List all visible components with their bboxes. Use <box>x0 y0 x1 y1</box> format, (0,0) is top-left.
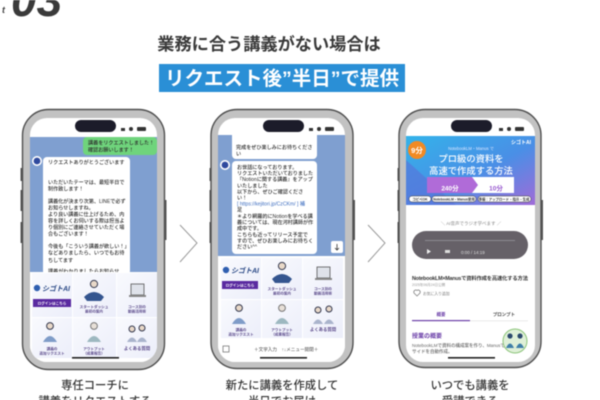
audio player <box>412 231 528 259</box>
phone 3 <box>398 110 543 368</box>
coach reply bubble: 講義化が決まり次第、LINEで必ず <box>48 198 126 205</box>
notch <box>263 120 304 132</box>
delivery message bubble: 『Notionに関する講義』をアップ <box>237 176 313 183</box>
user message bubble: 講義をリクエストしました！ <box>88 140 154 146</box>
coach reply bubble: いただいたテーマは、最短半日で <box>48 179 124 186</box>
logo cell: ログインはこちら <box>38 300 67 306</box>
status icons <box>121 127 146 131</box>
comparison bar <box>427 177 514 193</box>
favorite: お気に入り追加 <box>423 291 450 296</box>
menu request <box>39 323 65 356</box>
lecture banner: コピペOK <box>412 196 428 201</box>
menu request: 追加リクエスト <box>228 332 254 336</box>
menu faq: よくある質問 <box>310 326 337 333</box>
notch <box>75 120 116 132</box>
delivery message bubble: すので、ぜひお楽しみにお待ちく <box>237 238 313 244</box>
menu start guide: スタートダッシュ <box>80 304 109 309</box>
duration badge: 9分 <box>411 145 423 155</box>
audio player: 0:00 / 14:19 <box>461 250 485 255</box>
coach reply bubble: リクエストありがとうございます <box>48 159 124 166</box>
input bar <box>223 346 318 353</box>
comparison bar: 10分 <box>489 184 503 192</box>
summary text: NotebookLMで資料の構成案を作り、Manusで <box>412 342 505 349</box>
menu output: （成果報告） <box>271 332 293 336</box>
home indicator <box>260 357 307 359</box>
logo cell <box>222 266 260 289</box>
user message bubble: 確認お願いします！ <box>88 146 134 154</box>
lecture banner: NotebookLM・Manus で <box>448 146 494 151</box>
logo cell: ログインはこちら <box>226 282 255 288</box>
coach badge <box>503 329 527 353</box>
delivery message bubble: ＊より網羅的にNotionを学べる講 <box>237 213 313 220</box>
status icons <box>499 127 524 131</box>
home indicator <box>72 357 119 359</box>
user message bubble <box>83 137 157 155</box>
phone 2 frame <box>210 110 355 368</box>
coach reply bubble: り個別にご連絡させていただく場 <box>48 224 124 231</box>
date: 2025年06月24日公開 <box>412 282 446 287</box>
caption 3 <box>430 378 510 400</box>
tabs: プロンプト <box>493 311 515 318</box>
phone 3 frame <box>398 110 543 368</box>
coach reply bubble: お知らせしますね。 <box>48 204 94 212</box>
lecture banner: プロ級の資料を <box>438 153 504 164</box>
menu start guide: スタートダッシュ <box>268 286 297 291</box>
lecture banner <box>406 136 535 205</box>
coach reply bubble: より良い講義に仕上げるため、内 <box>48 211 124 218</box>
phone 2 screen <box>218 130 345 362</box>
phone 2 <box>210 110 355 368</box>
delivery message bubble: 以下から、ぜひご確認くださ <box>237 188 303 196</box>
menu course list: 動画活用術 <box>128 308 146 314</box>
coach reply bubble: 容を詳しくお伺いする際は担当よ <box>48 218 124 224</box>
menu output <box>271 305 293 336</box>
home indicator <box>448 357 495 359</box>
coach reply bubble: 合もございます！ <box>48 230 89 238</box>
caption 2 <box>226 378 338 400</box>
caption 1 <box>39 378 151 400</box>
delivery message bubble <box>232 161 317 254</box>
status icons <box>309 127 334 131</box>
delivery message bubble: お世話になっております。 <box>237 164 297 171</box>
menu grid <box>217 255 346 338</box>
menu request: 講義の <box>236 327 247 332</box>
summary heading: 授業の概要 <box>412 332 442 340</box>
menu course list: コース別の <box>128 304 146 309</box>
delivery message bubble: い！ <box>237 196 247 202</box>
menu course list: 動画活用術 <box>314 290 332 296</box>
delivery message bubble: 義については、現在河村講師が作 <box>237 219 313 226</box>
lecture banner: 準備：アップロード・指示・生成 <box>479 196 530 201</box>
delivery message bubble: [ https://kejitori.jp/CzCKm/ ] 補 <box>237 200 305 208</box>
highlighted subheading: リクエスト後”半日”で提供 <box>165 68 399 90</box>
lecture banner: シゴトAI <box>511 139 532 146</box>
coach reply bubble: 今後も「こういう講義が欲しい！」 <box>48 243 130 250</box>
coach reply bubble <box>43 157 130 275</box>
caption 1: 専任コーチに <box>61 378 129 392</box>
point number 03: t <box>2 5 6 15</box>
tabs <box>412 311 528 321</box>
logo cell: シゴトAI <box>231 266 260 275</box>
previous message bubble: い <box>236 152 241 158</box>
logo cell <box>33 284 71 307</box>
menu request: 追加リクエスト <box>39 350 65 356</box>
input bar: ＋文字入力 ↑↓メニュー開閉＋ <box>254 346 318 353</box>
menu start guide: 最初の案内 <box>85 308 103 314</box>
menu output: （成果報告） <box>83 350 105 356</box>
phone 1 frame <box>20 110 166 370</box>
coach reply bubble: 講義がわかりましたらお知らせ <box>48 268 119 275</box>
lecture banner: 高速で作成する方法 <box>429 165 514 176</box>
lecture title: NotebookLM×Manusで資料作成を高速化する方法 <box>412 274 529 282</box>
tabs: 概要 <box>436 311 446 318</box>
lecture banner: NotebookLM・Manus使用 <box>433 196 475 201</box>
menu output: アウトプット <box>271 327 293 332</box>
coach avatar <box>32 156 42 166</box>
menu course list <box>314 267 332 296</box>
menu grid <box>30 272 157 362</box>
delivery message bubble: 成中です。 <box>237 225 262 232</box>
coach reply bubble: 制作致します！ <box>48 186 84 192</box>
menu course list <box>128 284 146 314</box>
arrow 2 <box>368 225 385 262</box>
audio caption: ＼ AI音声でラジオ学べます ／ <box>441 220 502 227</box>
scroll down button <box>331 241 343 253</box>
heading: 業務に合う講義がない場合は <box>157 34 381 54</box>
delivery message bubble: こちらも近ってリリース予定で <box>237 232 308 238</box>
menu request: 講義の <box>47 346 58 351</box>
delivery message bubble: ださい^^ <box>237 244 258 250</box>
coach avatar <box>220 160 230 170</box>
logo cell: シゴトAI <box>42 284 71 293</box>
phone 1 <box>20 110 166 370</box>
menu start guide: 最初の案内 <box>273 290 291 296</box>
menu output <box>83 323 105 356</box>
caption 3: いつでも講義を <box>430 378 510 392</box>
menu output: アウトプット <box>83 346 105 351</box>
coach reply bubble: ちしてます <box>48 257 73 264</box>
favorite <box>414 290 450 296</box>
menu start guide <box>80 280 109 314</box>
tag pills <box>409 196 531 202</box>
delivery message bubble: 足 <box>237 208 242 214</box>
previous message bubble: 完成をぜひ楽しみにお待ちくださ <box>236 144 312 151</box>
notch <box>451 120 492 132</box>
delivery message bubble: リクエストいただいておりました <box>237 170 313 177</box>
menu faq: よくある質問 <box>124 345 151 352</box>
phone 1 screen <box>30 137 157 362</box>
caption 2: 新たに講義を作成して <box>226 378 338 392</box>
delivery message bubble: いたしました <box>237 182 268 190</box>
menu request <box>228 305 254 336</box>
menu course list: コース別の <box>314 286 332 291</box>
coach reply bubble: などありましたら、いつでもお待 <box>48 250 124 256</box>
phone 3 screen <box>406 136 535 359</box>
previous message bubble <box>232 130 317 159</box>
comparison bar: 240分 <box>441 184 459 192</box>
arrow 1 <box>180 225 197 262</box>
menu start guide <box>268 262 297 296</box>
summary text: サイドを自動作成。 <box>412 348 452 355</box>
